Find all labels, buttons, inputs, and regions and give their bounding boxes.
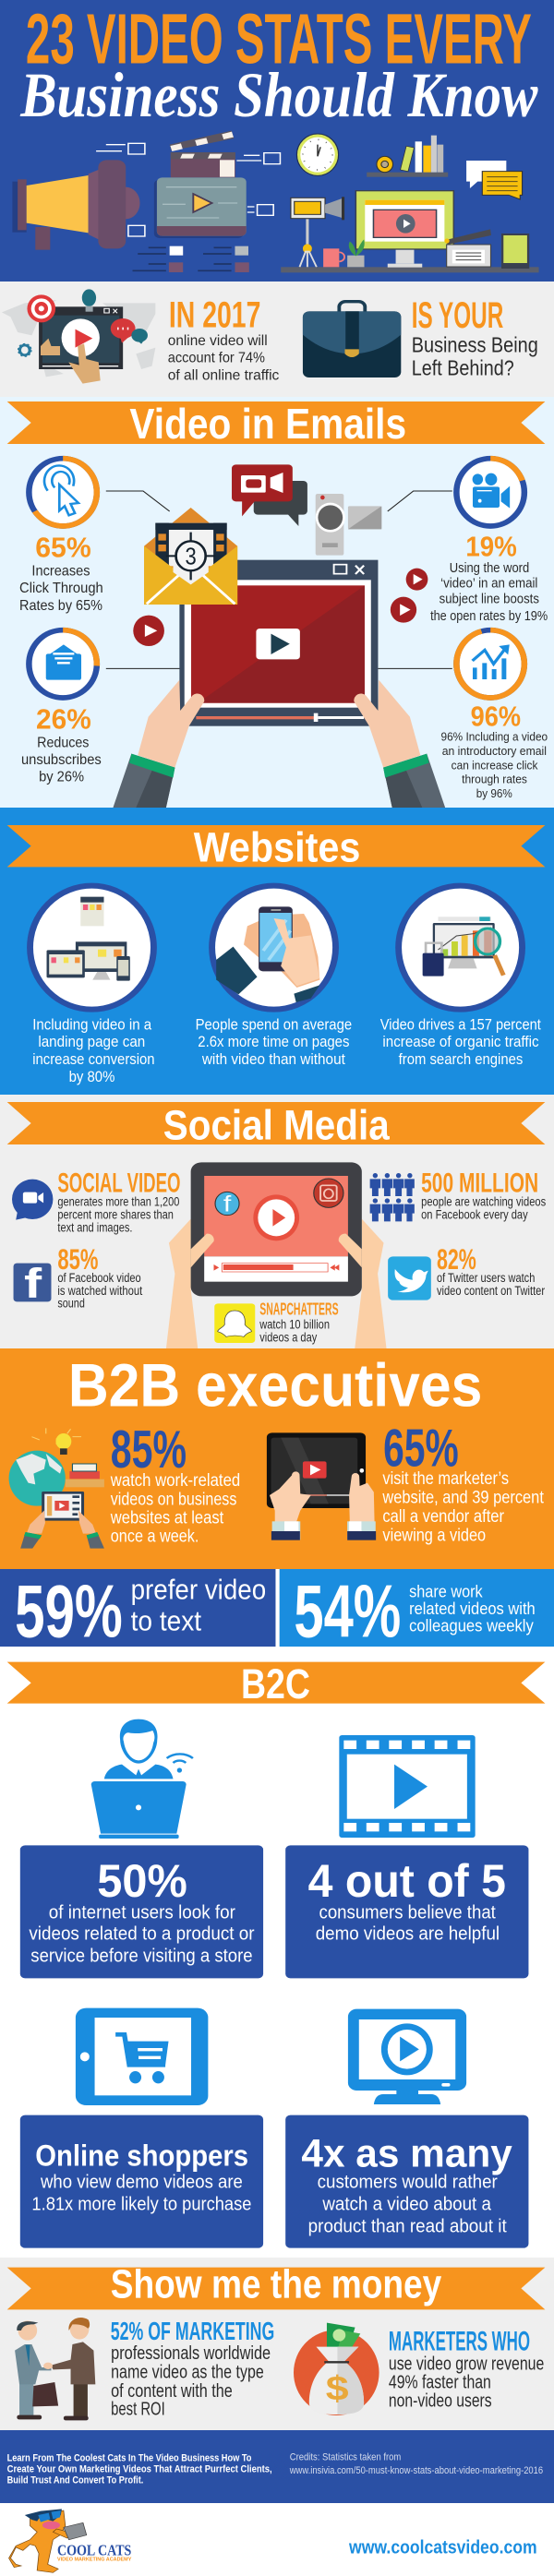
card: 4 out of 5: 4 out of 5 — [308, 1855, 506, 1907]
card: online shoppers: Online shoppers — [35, 2139, 248, 2173]
panel: b2c — [0, 1647, 554, 2258]
card: online shoppers: who view demo videos are — [40, 2172, 243, 2192]
stat: 52 percent of marketing: 52% OF MARKETING — [111, 2318, 274, 2346]
stat: 19 percent — [430, 459, 548, 624]
icon: megaphone — [12, 143, 145, 250]
text: learn from the coolest cats — [7, 2451, 272, 2486]
stat: 85 percent facebook: is watched without — [57, 1284, 143, 1299]
logo: cool cats — [9, 2509, 132, 2572]
stat: 26 percent: Reduces — [37, 733, 89, 750]
stat: 65 percent — [19, 459, 103, 614]
stat: social video: percent more shares than — [57, 1208, 174, 1222]
stat: social video: text and images. — [57, 1220, 132, 1235]
icon: speech bubbles — [466, 161, 523, 199]
heading ribbon: websites: Websites — [194, 824, 360, 871]
illustration: hands on tablet — [267, 1432, 376, 1540]
stat: 96 percent: 96% — [471, 701, 521, 732]
card: online shoppers: 1.81x more likely to purchase — [31, 2194, 251, 2214]
stat: 52 percent of marketing — [111, 2318, 274, 2419]
stat: social video — [12, 1168, 181, 1235]
panel: 54 percent share work: 54% — [294, 1571, 401, 1653]
stat: social video: SOCIAL VIDEO — [57, 1168, 181, 1198]
illustration: money bag: $ — [326, 2369, 349, 2407]
card: 4 out of 5 — [285, 1845, 528, 1978]
stat: 85 percent facebook — [14, 1243, 143, 1311]
stat: in 2017: of all online traffic — [168, 366, 280, 383]
stat: 65 percent: Increases — [31, 561, 90, 579]
stat: 65 percent: call a vendor after — [382, 1506, 504, 1527]
stat: social video: generates more than 1,200 — [57, 1195, 179, 1209]
stat: 96 percent — [441, 630, 548, 800]
illustration: right hand — [354, 680, 445, 808]
illustration: left hand — [113, 680, 204, 808]
stat: snapchatters: videos a day — [259, 1330, 318, 1345]
stat: marketers who: 49% faster than — [389, 2372, 491, 2392]
stat: 85 percent facebook: sound — [57, 1297, 85, 1311]
stat: 65 percent: 65% — [383, 1419, 459, 1478]
illustration: businessmen shaking hands — [15, 2318, 95, 2420]
card: 50 percent: 50% — [97, 1855, 187, 1907]
illustration: money bag — [294, 2323, 379, 2415]
text: learn from the coolest cats: Create Your Own Marketing Videos That Attract Purrfect Clients, — [7, 2462, 272, 2474]
illustration: globe and tablet — [9, 1428, 104, 1549]
logo: cool cats: VIDEO MARKETING ACADEMY — [57, 2558, 132, 2562]
card: 50 percent: of internet users look for — [49, 1902, 235, 1923]
icon: shelf with books — [367, 136, 448, 177]
card: 4x as many: 4x as many — [301, 2131, 512, 2175]
panel: 59 percent prefer video — [0, 1569, 275, 1653]
stat: 65 percent: Rates by 65% — [19, 596, 102, 614]
heading ribbon: show me the money: Show me the money — [111, 2261, 441, 2306]
panel: social media — [0, 1095, 554, 1349]
text: learn from the coolest cats: Build Trust And Convert To Profit. — [7, 2474, 143, 2486]
stat: 85 percent facebook: of Facebook video — [57, 1271, 141, 1286]
card: 4x as many: customers would rather — [318, 2172, 498, 2192]
panel: 59 percent prefer video: to text — [131, 1605, 201, 1636]
panel: video in emails — [0, 397, 554, 808]
icon: film strip — [339, 1735, 476, 1838]
stat: time on pages — [196, 886, 352, 1068]
stat: 65 percent: Click Through — [19, 579, 103, 596]
stat: 26 percent — [21, 630, 102, 785]
heading ribbon: websites — [7, 824, 545, 871]
stat: organic traffic: from search engines — [399, 1050, 523, 1068]
panel: 59 percent prefer video: 59% — [15, 1571, 123, 1653]
stat: 52 percent of marketing: best ROI — [111, 2399, 165, 2419]
heading ribbon: social media — [7, 1102, 545, 1149]
text: learn from the coolest cats: Learn From The Coolest Cats In The Video Business How To — [7, 2451, 251, 2463]
stat: 26 percent: by 26% — [39, 768, 84, 785]
stat: 85 percent facebook: 85% — [57, 1243, 98, 1276]
panel: 54 percent share work — [280, 1569, 554, 1653]
icon: desktop computer on desk — [281, 191, 539, 272]
icon: play buttons — [133, 569, 428, 646]
panel: show me the money — [0, 2258, 554, 2430]
stat: marketers who — [389, 2326, 544, 2411]
illustration: tablet with video — [179, 560, 378, 726]
stat: time on pages: with video than without — [201, 1050, 345, 1068]
stat: in 2017 — [168, 294, 280, 383]
heading ribbon: b2c — [7, 1661, 545, 1707]
panel: b2b executives — [0, 1348, 554, 1653]
stat: snapchatters: watch 10 billion — [259, 1317, 330, 1332]
stat: 96 percent: can increase click — [452, 759, 538, 772]
stat: 500 million — [370, 1168, 546, 1222]
illustration: envelope with countdown film — [144, 508, 237, 605]
stat: 65 percent: viewing a video — [382, 1526, 486, 1545]
stat: 85 percent: websites at least — [110, 1508, 223, 1528]
panel: intro — [0, 282, 554, 397]
stat: 85 percent: videos on business — [111, 1490, 236, 1509]
panel: footer credits — [0, 2430, 554, 2503]
stat: landing page conversion: increase conversion — [32, 1050, 155, 1068]
icon: video chat bubbles — [232, 464, 307, 526]
icon: clapperboard and video player — [132, 131, 280, 272]
card: 4x as many: product than read about it — [308, 2216, 507, 2236]
icon: briefcase — [303, 302, 401, 377]
stat: landing page conversion: Including video in a — [32, 1015, 151, 1033]
icon: monitor with play — [348, 2009, 466, 2104]
illustration: hands holding tablet — [166, 1162, 387, 1349]
connector lines — [106, 491, 452, 668]
stat: snapchatters — [214, 1300, 339, 1345]
text: credits — [289, 2450, 543, 2476]
illustration: video player with hand — [2, 289, 155, 384]
icon: clock — [296, 134, 339, 175]
stat: 85 percent: 85% — [111, 1420, 187, 1480]
stat: 85 percent facebook: f — [24, 1261, 42, 1307]
card: 50 percent: videos related to a product or — [29, 1923, 255, 1944]
panel: logo footer — [0, 2503, 554, 2576]
panel: 54 percent share work: share work — [409, 1583, 483, 1601]
stat: 19 percent: Using the word — [450, 561, 529, 576]
stat: 96 percent: by 96% — [476, 787, 512, 800]
card: 4x as many: watch a video about a — [321, 2194, 491, 2214]
stat: time on pages: People spend on average — [196, 1015, 352, 1033]
stat: landing page conversion — [30, 886, 155, 1085]
stat: is your business — [412, 295, 538, 380]
card: 4 out of 5: demo videos are helpful — [316, 1923, 500, 1944]
card: 4 out of 5: consumers believe that — [319, 1902, 496, 1923]
logo: cool cats: COOL CATS — [57, 2541, 131, 2559]
stat: in 2017: online video will — [168, 331, 268, 349]
panel: 59 percent prefer video: prefer video — [131, 1574, 266, 1605]
heading ribbon: video in emails: Video in Emails — [129, 400, 406, 448]
stat: 26 percent: unsubscribes — [21, 750, 102, 768]
stat: 65 percent — [382, 1419, 544, 1545]
stat: 52 percent of marketing: professionals worldwide — [111, 2342, 271, 2364]
stat: 65 percent: 65% — [35, 531, 91, 563]
card: 50 percent — [20, 1845, 263, 1978]
stat: in 2017: account for 74% — [168, 349, 265, 365]
icon: tablet with cart — [76, 2008, 208, 2105]
icon: person with laptop — [91, 1719, 193, 1839]
heading ribbon: video in emails — [7, 400, 545, 448]
heading ribbon: social media: Social Media — [163, 1102, 391, 1149]
illustration: hands holding tablet: f — [223, 1192, 232, 1216]
card: 4x as many — [285, 2115, 528, 2248]
stat: 19 percent: 19% — [465, 530, 517, 562]
stat: 65 percent: visit the marketer’s — [382, 1468, 509, 1489]
stat: organic traffic — [380, 886, 541, 1068]
stat: 82 percent twitter — [388, 1243, 545, 1300]
stat: 85 percent — [110, 1420, 240, 1546]
stat: 96 percent: through rates — [462, 773, 527, 785]
stat: landing page conversion: landing page can — [38, 1033, 145, 1050]
card: 50 percent: service before visiting a store — [30, 1946, 253, 1966]
stat: 52 percent of marketing: of content with the — [111, 2380, 233, 2402]
text: credits: Credits: Statistics taken from — [290, 2450, 401, 2462]
stat: 26 percent: 26% — [36, 702, 91, 735]
panel: social media: SNAPCHATTERS — [259, 1300, 339, 1319]
icon: handheld camera — [316, 494, 381, 556]
card: online shoppers — [20, 2115, 263, 2248]
stat: marketers who: non-video users — [389, 2390, 492, 2411]
illustration: envelope with countdown film: 3 — [186, 543, 197, 569]
stat: is your business: Left Behind? — [412, 357, 514, 380]
stat: 82 percent twitter: 82% — [437, 1243, 476, 1276]
panel: header — [0, 0, 554, 282]
stat: 52 percent of marketing: name video as the type — [111, 2362, 264, 2382]
icon: camera on tripod — [291, 197, 344, 267]
stat: landing page conversion: by 80% — [69, 1068, 114, 1085]
heading ribbon: b2c: B2C — [241, 1661, 310, 1707]
stat: 85 percent: once a week. — [111, 1527, 199, 1546]
stat: in 2017: IN 2017 — [169, 294, 260, 336]
stat: 85 percent: watch work-related — [110, 1470, 240, 1491]
stat: time on pages: 2.6x more time on pages — [198, 1033, 349, 1050]
panel: websites — [0, 808, 554, 1095]
